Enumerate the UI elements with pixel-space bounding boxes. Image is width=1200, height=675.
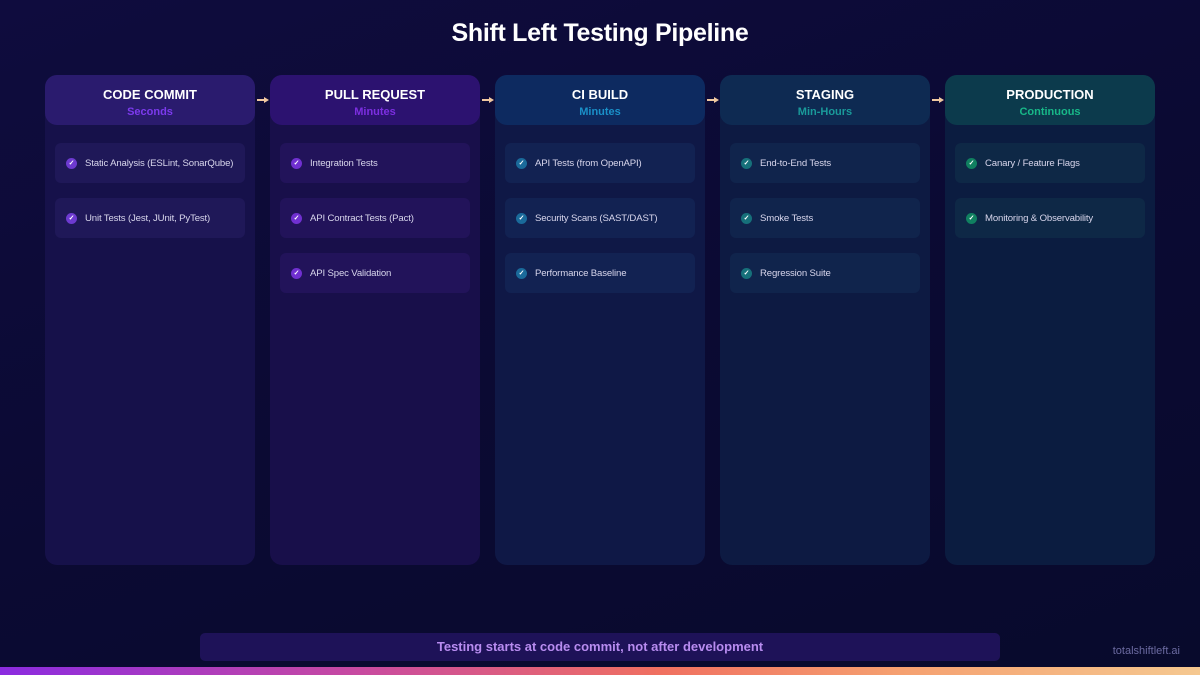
item: api spec validation (280, 253, 470, 293)
item: static analysis: ✓ (69, 160, 74, 167)
item: e2e: End-to-End Tests (760, 158, 831, 168)
item: smoke (730, 198, 920, 238)
header: ci build (495, 75, 705, 125)
item: smoke: ✓ (744, 215, 749, 222)
item: integration tests (280, 143, 470, 183)
item: canary (955, 143, 1145, 183)
header: code commit: Seconds (127, 106, 173, 118)
gradient bar (0, 667, 1200, 675)
item: integration tests: Integration Tests (310, 158, 378, 168)
brand: totalshiftleft.ai (1113, 645, 1180, 657)
item: api tests (505, 143, 695, 183)
item: monitoring: Monitoring & Observability (985, 212, 1093, 224)
item: regression (730, 253, 920, 293)
arrow (482, 99, 494, 102)
header: ci build: Minutes (579, 106, 621, 118)
item: security scans: Security Scans (SAST/DAST) (535, 212, 657, 224)
panel: code commit (45, 75, 255, 565)
item: unit tests (55, 198, 245, 238)
item: e2e: ✓ (744, 160, 749, 167)
item: api tests: ✓ (519, 160, 524, 167)
footer callout (200, 633, 1000, 661)
panel: staging (720, 75, 930, 565)
header: staging: STAGING (796, 87, 854, 102)
item: canary: Canary / Feature Flags (985, 158, 1080, 168)
item: api contract tests (280, 198, 470, 238)
footer callout: Testing starts at code commit, not after development (437, 639, 763, 654)
item: regression: ✓ (744, 270, 749, 277)
panel: ci build (495, 75, 705, 565)
item: api tests: API Tests (from OpenAPI) (535, 158, 642, 168)
item: regression: Regression Suite (760, 268, 831, 278)
item: smoke: Smoke Tests (760, 212, 813, 224)
arrow (257, 99, 269, 102)
item: static analysis (55, 143, 245, 183)
item: integration tests: ✓ (294, 160, 299, 167)
header: production: Continuous (1019, 106, 1081, 118)
item: unit tests: Unit Tests (Jest, JUnit, PyTest) (85, 212, 210, 224)
item: security scans: ✓ (519, 215, 524, 222)
header: pull request: PULL REQUEST (325, 87, 425, 102)
header: staging: Min-Hours (798, 106, 852, 118)
item: monitoring: ✓ (969, 215, 974, 222)
item: performance baseline: Performance Baseline (535, 268, 626, 278)
header: code commit: CODE COMMIT (103, 87, 197, 102)
header: code commit (45, 75, 255, 125)
item: api spec validation: ✓ (294, 270, 299, 277)
item: api spec validation: API Spec Validation (310, 268, 391, 278)
item: performance baseline (505, 253, 695, 293)
item: unit tests: ✓ (69, 215, 74, 222)
panel: production (945, 75, 1155, 565)
item: performance baseline: ✓ (519, 270, 524, 277)
arrow (932, 99, 944, 102)
header: ci build: CI BUILD (572, 87, 628, 102)
item: monitoring (955, 198, 1145, 238)
item: api contract tests: ✓ (294, 215, 299, 222)
item: e2e (730, 143, 920, 183)
item: canary: ✓ (969, 160, 974, 167)
header: production (945, 75, 1155, 125)
arrow (707, 99, 719, 102)
panel: pull request (270, 75, 480, 565)
item: security scans (505, 198, 695, 238)
item: static analysis: Static Analysis (ESLint, SonarQube) (85, 158, 233, 168)
header: production: PRODUCTION (1006, 87, 1094, 102)
title: Shift Left Testing Pipeline (451, 19, 748, 47)
header: pull request: Minutes (354, 106, 396, 118)
item: api contract tests: API Contract Tests (Pact) (310, 212, 414, 224)
header: pull request (270, 75, 480, 125)
header: staging (720, 75, 930, 125)
